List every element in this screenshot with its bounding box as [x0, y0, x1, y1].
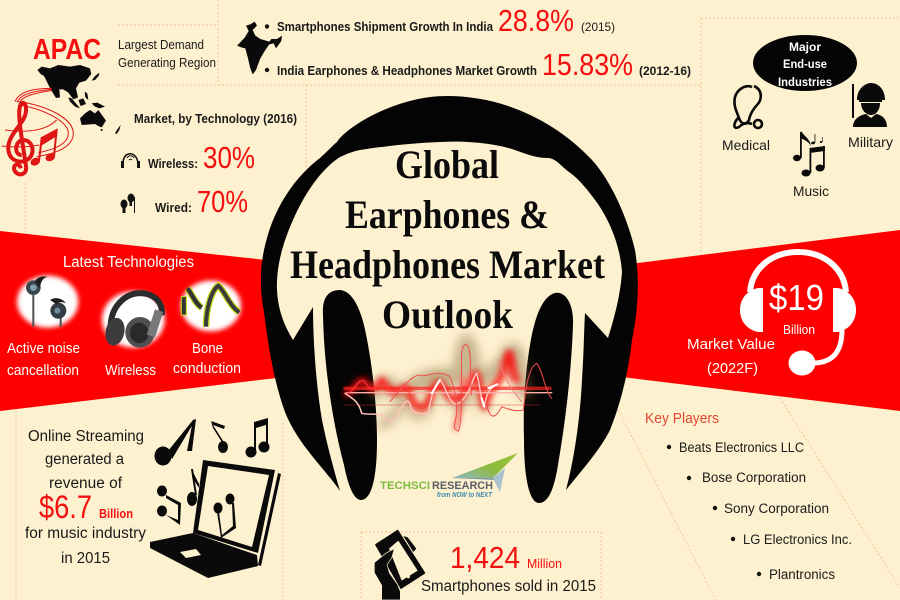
heading: key players: Key Players	[645, 410, 719, 427]
icon: stethoscope	[734, 86, 762, 128]
stat: wireless share	[148, 140, 255, 175]
logo: TechSci Research	[380, 453, 518, 499]
label: market value 2022F	[687, 336, 775, 377]
panel: latest technologies	[7, 254, 241, 379]
stat: 1,424 million: Million	[527, 557, 562, 571]
text: largest demand region: Largest Demand	[118, 37, 204, 52]
heading: latest technologies: Latest Technologies	[63, 254, 194, 271]
panel: key players	[645, 410, 852, 582]
panel: smartphones sold	[374, 531, 596, 600]
label: wireless: Wireless	[105, 363, 156, 379]
icon: hand holding phone	[374, 531, 424, 600]
stat: India earphones market growth: (2012-16)	[639, 64, 691, 78]
panel: online streaming revenue	[25, 428, 146, 567]
list: companies	[667, 440, 852, 582]
list: companies: Plantronics	[769, 567, 835, 582]
panel: online streaming revenue: generated a	[45, 451, 124, 468]
panel: online streaming revenue: Online Streaming	[28, 428, 144, 445]
text: largest demand region: Generating Region	[118, 55, 216, 70]
icon: wired earbuds	[120, 194, 135, 213]
stat: India earphones market growth: 15.83%	[542, 47, 633, 82]
icon: bone conduction photo	[181, 281, 241, 331]
heading: major end-use industries oval: Industries	[778, 75, 832, 89]
band and outer cups	[261, 96, 638, 491]
laptop screen and base	[150, 460, 281, 578]
icon: soldier	[852, 83, 887, 127]
label: active noise cancellation: cancellation	[7, 363, 79, 379]
icon: APAC map with music clef	[2, 34, 121, 174]
label: bone conduction: Bone	[192, 341, 223, 357]
title: Headphones Market	[290, 242, 606, 287]
stat: market value amount: $19	[769, 277, 824, 318]
icon: treble clef and swirling staff	[2, 88, 73, 174]
title: Outlook	[382, 292, 514, 337]
icon: active noise earbuds photo	[17, 276, 78, 328]
heading: major end-use industries oval	[753, 35, 857, 91]
label: medical: Medical	[722, 137, 770, 153]
logo wordmark: RESEARCH	[432, 480, 493, 492]
stat: wired share: Wired:	[155, 200, 192, 215]
label: smartphones sold in 2015: Smartphones sold in 2015	[421, 578, 596, 595]
label: market value 2022F: Market Value	[687, 336, 775, 353]
heading: market by technology: Market, by Technology (2016)	[134, 111, 297, 126]
list: companies: LG Electronics Inc.	[743, 532, 852, 547]
icon: wireless headphones photo	[102, 291, 165, 348]
notes floating above laptop	[154, 418, 270, 525]
stat: 1,424 million: 1,424	[450, 540, 520, 575]
icon: India map	[237, 22, 282, 74]
list: companies: Bose Corporation	[702, 470, 806, 485]
icon: music notes	[793, 131, 825, 176]
illustration: headphones silhouette	[261, 96, 638, 503]
icon: white headset	[740, 252, 856, 376]
title	[290, 142, 606, 337]
illustration: red sound wave	[345, 343, 552, 431]
heading: APAC: APAC	[33, 34, 101, 66]
stat: 1,424 million	[450, 540, 562, 575]
panel: online streaming revenue: $6.7	[39, 489, 92, 525]
icon: laptop with music notes	[150, 418, 281, 578]
heading: major end-use industries oval: Major	[789, 40, 821, 54]
panel: major end-use industries	[722, 35, 893, 199]
text: largest demand region	[118, 37, 216, 70]
panel: red ribbon right	[622, 230, 900, 411]
panel: online streaming revenue: for music industry	[25, 525, 146, 542]
left ear pad	[323, 290, 377, 500]
stat: smartphone shipment growth: (2015)	[581, 20, 615, 34]
list: companies: Sony Corporation	[724, 501, 829, 516]
label: music: Music	[793, 183, 829, 199]
stat: wireless share: Wireless:	[148, 156, 198, 171]
list: companies: Beats Electronics LLC	[679, 440, 804, 455]
label: market value 2022F: (2022F)	[707, 360, 758, 377]
panel: market value	[687, 252, 856, 377]
stat: smartphone shipment growth	[265, 3, 615, 38]
label: bone conduction: conduction	[173, 361, 241, 377]
label: active noise cancellation: Active noise	[7, 341, 80, 357]
logo wordmark	[380, 480, 493, 499]
stat: India earphones market growth	[265, 47, 691, 82]
stat: smartphone shipment growth: 28.8%	[498, 3, 574, 38]
logo wordmark: TECHSCI	[380, 480, 430, 492]
icon: Asia Pacific map	[37, 65, 121, 134]
icon: wireless headphones	[121, 154, 140, 168]
stat: market value amount: Billion	[783, 323, 815, 337]
label: active noise cancellation	[7, 341, 80, 379]
heading: major end-use industries oval: End-use	[783, 57, 827, 71]
panel: online streaming revenue: revenue of	[49, 475, 123, 492]
right ear pad	[524, 293, 573, 503]
stat: smartphone shipment growth: Smartphones Shipment Growth In India	[277, 19, 494, 34]
label: bone conduction	[173, 341, 241, 377]
panel: market by technology	[120, 111, 297, 219]
panel: red ribbon left	[0, 231, 276, 411]
stat: wireless share: 30%	[203, 140, 255, 175]
logo mark	[452, 453, 518, 492]
title: Global	[395, 142, 499, 187]
stat: market value amount	[769, 277, 824, 337]
panel: India statistics	[265, 3, 691, 82]
panel: online streaming revenue: in 2015	[61, 550, 110, 567]
stat: wired share: 70%	[197, 184, 248, 219]
title: Earphones &	[345, 192, 549, 237]
logo wordmark: from NOW to NEXT	[437, 492, 493, 499]
stat: wired share	[155, 184, 248, 219]
stat: India earphones market growth: India Earphones & Headphones Market Growth	[277, 63, 537, 78]
label: military: Military	[848, 134, 893, 150]
panel: online streaming revenue: Billion	[99, 507, 133, 521]
